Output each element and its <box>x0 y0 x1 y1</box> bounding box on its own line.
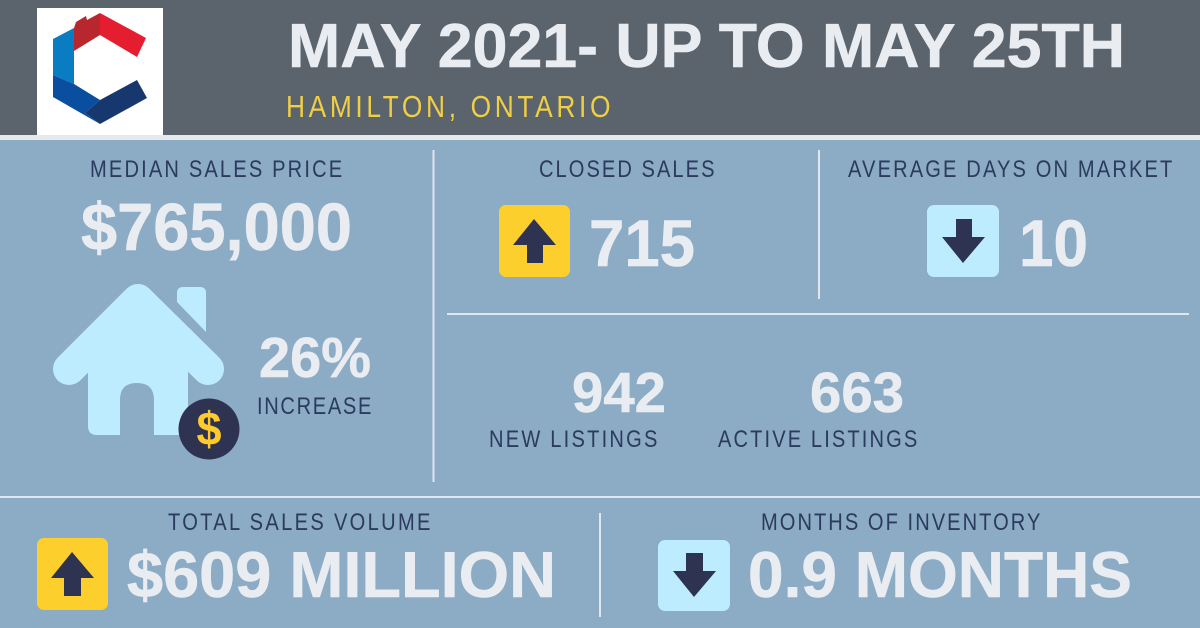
label: total sales volume: TOTAL SALES VOLUME <box>168 508 430 535</box>
header band <box>0 0 1200 140</box>
label: new listings: NEW LISTINGS <box>489 425 657 452</box>
panel: average days on market <box>848 155 1173 280</box>
value: 0.9 months: 0.9 MONTHS <box>748 538 1132 611</box>
value: 715: 715 <box>589 206 695 280</box>
value: 663: 663 <box>810 361 904 425</box>
panel: median sales price <box>69 155 371 460</box>
panel: closed sales <box>499 155 714 280</box>
panel dividers <box>0 150 1200 617</box>
icon: house with dollar coin: $ <box>196 402 222 455</box>
value: 942: 942 <box>572 361 666 425</box>
icon: down arrow <box>658 540 730 611</box>
icon: down arrow <box>927 205 999 277</box>
value: 26%: 26% <box>259 326 371 390</box>
icon: up arrow <box>499 205 570 277</box>
panel: months of inventory <box>658 508 1132 611</box>
logo <box>37 8 163 135</box>
value: median price: $765,000 <box>81 190 352 265</box>
value: 10: 10 <box>1019 206 1088 280</box>
label: increase: INCREASE <box>257 392 371 419</box>
value: $609 million: $609 MILLION <box>127 538 556 611</box>
panel: total sales volume <box>37 508 556 611</box>
label: median sales price: MEDIAN SALES PRICE <box>90 155 342 182</box>
subtitle: HAMILTON, ONTARIO <box>286 90 610 125</box>
panel: new listings <box>489 361 666 452</box>
label: months of inventory: MONTHS OF INVENTORY <box>761 508 1040 535</box>
panel: active listings <box>718 361 917 452</box>
label: closed sales: CLOSED SALES <box>539 155 714 182</box>
icon: house with dollar coin <box>69 287 240 460</box>
title: MAY 2021- UP TO MAY 25TH <box>288 11 1125 81</box>
icon: up arrow <box>37 538 108 610</box>
label: active listings: ACTIVE LISTINGS <box>718 425 917 452</box>
label: average days on market: AVERAGE DAYS ON MARKET <box>848 155 1173 182</box>
